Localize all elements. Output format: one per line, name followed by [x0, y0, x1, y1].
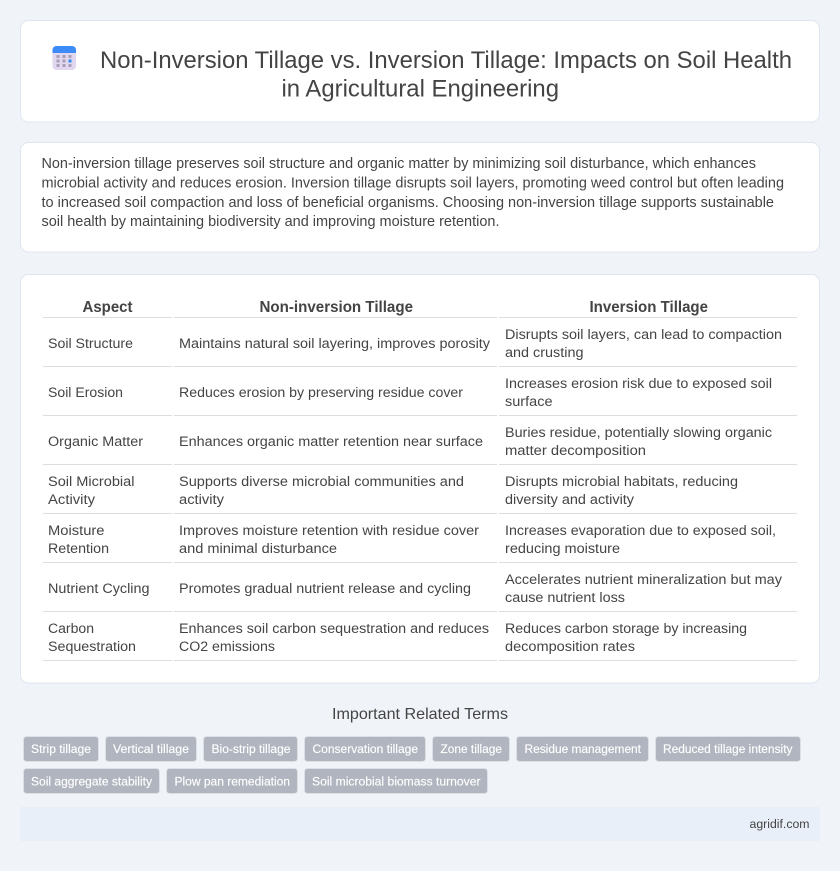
panel: comparison table	[20, 274, 820, 683]
row: moisture retention: and minimal disturbance	[179, 541, 337, 557]
row: soil microbial activity	[43, 474, 797, 514]
row: carbon sequestration: Enhances soil carbon sequestration and reduces	[179, 621, 489, 637]
row: soil microbial activity: Disrupts microbial habitats, reducing	[505, 474, 738, 490]
panel: summary paragraph	[20, 142, 820, 252]
chip: vertical tillage: Vertical tillage	[113, 742, 189, 756]
chip: conservation tillage	[304, 736, 426, 762]
row: soil erosion: Increases erosion risk due to exposed soil	[505, 376, 772, 392]
text block: summary: Non-inversion tillage preserves soil structure and organic matter by minimizing soil disturbance, which enhances	[42, 156, 756, 172]
row: soil microbial activity: activity	[179, 492, 225, 508]
row: soil erosion	[43, 376, 797, 416]
row: soil erosion: Reduces erosion by preserving residue cover	[179, 385, 463, 401]
row: carbon sequestration: CO2 emissions	[179, 639, 275, 655]
chip: reduced tillage intensity	[656, 736, 800, 762]
row: nutrient cycling: Accelerates nutrient mineralization but may	[505, 572, 783, 588]
row: soil structure: Disrupts soil layers, can lead to compaction	[505, 327, 782, 343]
chip: soil aggregate stability	[24, 768, 160, 794]
row: soil structure: and crusting	[505, 345, 584, 361]
row: organic matter	[43, 425, 797, 464]
row: soil structure: Maintains natural soil layering, improves porosity	[179, 336, 491, 352]
row: carbon sequestration: decomposition rates	[505, 639, 635, 655]
chip: soil microbial biomass turnover	[304, 768, 488, 794]
chip: reduced tillage intensity: Reduced tillage intensity	[663, 742, 793, 756]
chip: bio-strip tillage: Bio-strip tillage	[212, 742, 291, 756]
table header: Inversion Tillage	[590, 299, 708, 316]
chip: zone tillage	[432, 736, 510, 762]
title	[100, 47, 792, 102]
row: moisture retention: Moisture	[48, 523, 105, 539]
table header: Non-inversion Tillage	[260, 299, 413, 316]
row: carbon sequestration	[43, 621, 797, 660]
row: organic matter: Buries residue, potentially slowing organic	[505, 425, 772, 441]
row: organic matter: Enhances organic matter retention near surface	[179, 434, 483, 450]
row: nutrient cycling: cause nutrient loss	[505, 590, 625, 606]
chip: zone tillage: Zone tillage	[440, 742, 502, 756]
chip: vertical tillage	[106, 736, 196, 762]
chip: residue management: Residue management	[524, 742, 642, 756]
row: nutrient cycling	[43, 572, 797, 612]
table header: Aspect	[82, 299, 133, 316]
row: organic matter: Organic Matter	[48, 434, 143, 450]
row: soil structure	[43, 327, 797, 366]
chip: soil aggregate stability: Soil aggregate stability	[31, 774, 153, 788]
chip: strip tillage	[24, 736, 98, 762]
row: soil structure: Soil Structure	[48, 336, 133, 352]
text block: summary: soil health by maintaining biodiversity and improving moisture retention.	[42, 214, 500, 230]
icon: calendar	[52, 46, 76, 70]
row: soil microbial activity: Supports diverse microbial communities and	[179, 474, 464, 490]
footer	[20, 807, 820, 841]
footer site name: agridif.com	[750, 817, 810, 831]
chip: bio-strip tillage	[204, 736, 298, 762]
row: nutrient cycling: Nutrient Cycling	[48, 581, 150, 597]
chip: conservation tillage: Conservation tillage	[312, 742, 418, 756]
row: moisture retention: reducing moisture	[505, 541, 620, 557]
row: carbon sequestration: Carbon	[48, 621, 94, 637]
related term chips	[24, 736, 800, 794]
row: soil erosion: surface	[505, 394, 553, 410]
row: moisture retention: Improves moisture retention with residue cover	[179, 523, 479, 539]
row: soil erosion: Soil Erosion	[48, 385, 123, 401]
text block: summary: to increased soil compaction and loss of beneficial organisms. Choosing non-inversion tillage supports sustainable	[42, 195, 774, 211]
row: moisture retention: Increases evaporation due to exposed soil,	[505, 523, 776, 539]
title: in Agricultural Engineering	[282, 76, 559, 102]
row: organic matter: matter decomposition	[505, 443, 646, 459]
chip: soil microbial biomass turnover: Soil microbial biomass turnover	[312, 774, 480, 788]
heading: important related terms: Important Related Terms	[332, 706, 508, 723]
row: soil microbial activity: diversity and activity	[505, 492, 635, 508]
row: soil microbial activity: Activity	[48, 492, 96, 508]
text block: summary: microbial activity and reduces erosion. Inversion tillage disrupts soil layers, promoting weed control but often leading	[42, 176, 784, 192]
title: Non-Inversion Tillage vs. Inversion Tillage: Impacts on Soil Health	[100, 47, 792, 74]
chip: strip tillage: Strip tillage	[31, 742, 91, 756]
chip: plow pan remediation	[166, 768, 298, 794]
text block: summary	[42, 156, 784, 230]
chip: residue management	[516, 736, 648, 762]
row: carbon sequestration: Sequestration	[48, 639, 136, 655]
table header	[43, 299, 797, 318]
row: soil microbial activity: Soil Microbial	[48, 474, 134, 490]
row: nutrient cycling: Promotes gradual nutrient release and cycling	[179, 581, 471, 597]
chip: plow pan remediation: Plow pan remediation	[174, 774, 290, 788]
panel: title header	[20, 20, 820, 122]
row: moisture retention: Retention	[48, 541, 109, 557]
row: moisture retention	[43, 523, 797, 562]
row: carbon sequestration: Reduces carbon storage by increasing	[505, 621, 747, 637]
